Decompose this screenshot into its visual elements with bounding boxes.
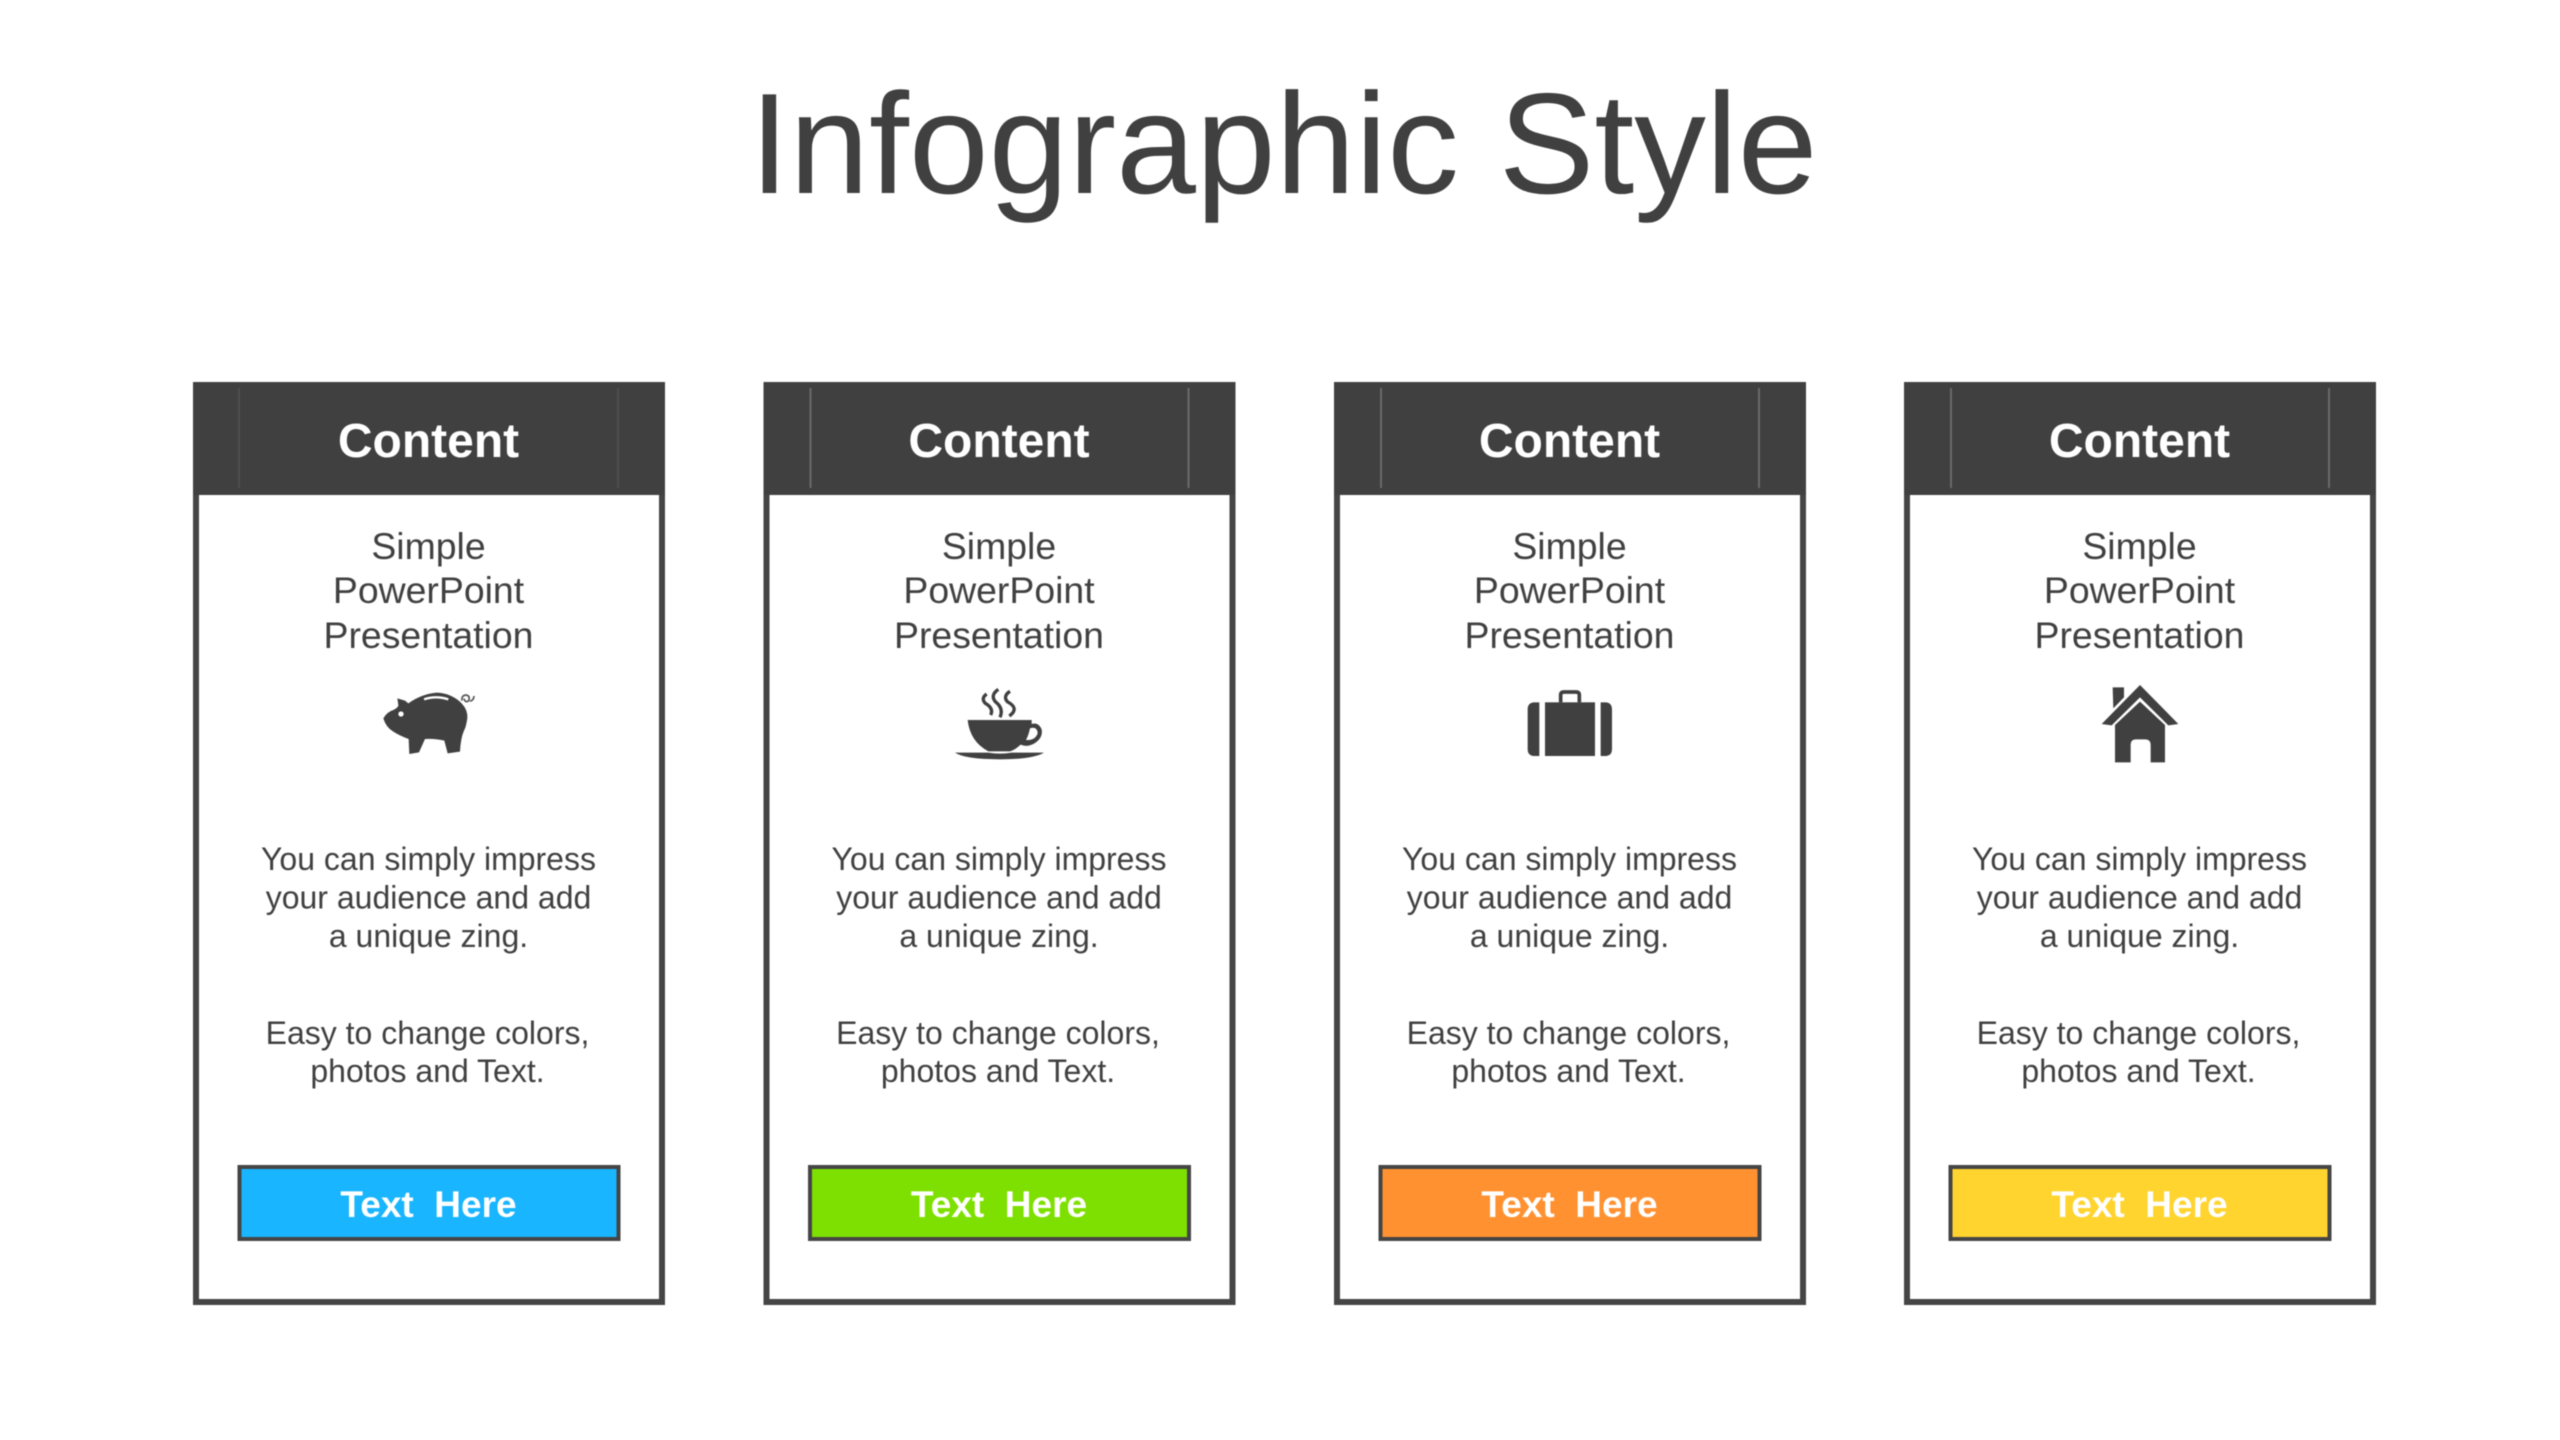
icon: piggy bank	[383, 693, 474, 754]
card 3 header	[1334, 382, 1806, 495]
card 3 subtitle: Presentation	[1465, 614, 1674, 656]
card 2 description: a unique zing.	[899, 918, 1099, 954]
card 3 subtitle: Simple	[1512, 525, 1627, 567]
icon: house	[2102, 685, 2178, 762]
card 2 note: Easy to change colors,	[836, 1015, 1160, 1051]
card 3 button	[1380, 1167, 1760, 1239]
card 1 description: You can simply impress	[261, 841, 596, 877]
card 2 button: Text Here	[911, 1184, 1087, 1225]
card 3 description: You can simply impress	[1402, 841, 1737, 877]
card 4 description: a unique zing.	[2040, 918, 2239, 954]
card 1 description: your audience and add	[266, 880, 591, 916]
icon: briefcase	[1528, 692, 1612, 756]
card 4 description: your audience and add	[1977, 880, 2302, 916]
card 4 button	[1950, 1167, 2330, 1239]
card 2 subtitle: PowerPoint	[903, 569, 1095, 611]
card 1 header	[193, 382, 665, 495]
card 1 header: Content	[338, 415, 519, 468]
card 3 header: Content	[1479, 415, 1660, 468]
card 1 button	[240, 1167, 618, 1239]
panel: card 1	[193, 382, 665, 1302]
card 2 note: photos and Text.	[881, 1053, 1115, 1089]
card 1 note: Easy to change colors,	[266, 1015, 589, 1051]
card 2 header: Content	[908, 415, 1090, 468]
card 2 button	[810, 1167, 1189, 1239]
panel: card 2	[764, 382, 1236, 1302]
card 1 button: Text Here	[340, 1184, 517, 1225]
card 4 header	[1904, 382, 2376, 495]
card 3 description: your audience and add	[1407, 880, 1732, 916]
card 1 subtitle: Simple	[371, 525, 486, 567]
panel: card 3	[1334, 382, 1806, 1302]
card 2 header	[764, 382, 1236, 495]
card 1 subtitle: Presentation	[324, 614, 533, 656]
card 3 note: Easy to change colors,	[1407, 1015, 1730, 1051]
card 1 description: a unique zing.	[329, 918, 528, 954]
card 2 description: You can simply impress	[832, 841, 1166, 877]
card 4 subtitle: Simple	[2082, 525, 2197, 567]
card 2 description: your audience and add	[836, 880, 1162, 916]
icon: coffee cup	[955, 689, 1044, 759]
card 2 subtitle: Presentation	[894, 614, 1104, 656]
card 4 header: Content	[2049, 415, 2230, 468]
card 4 subtitle: PowerPoint	[2044, 569, 2236, 611]
card 4 note: photos and Text.	[2021, 1053, 2256, 1089]
card 1 note: photos and Text.	[310, 1053, 545, 1089]
card 3 subtitle: PowerPoint	[1474, 569, 1666, 611]
card 4 subtitle: Presentation	[2035, 614, 2244, 656]
card 3 note: photos and Text.	[1451, 1053, 1686, 1089]
card 3 button: Text Here	[1481, 1184, 1658, 1225]
card 2 subtitle: Simple	[942, 525, 1056, 567]
card 1 subtitle: PowerPoint	[333, 569, 525, 611]
card 4 button: Text Here	[2051, 1184, 2228, 1225]
card 4 note: Easy to change colors,	[1977, 1015, 2300, 1051]
title: Infographic Style	[750, 64, 1817, 224]
card 3 description: a unique zing.	[1470, 918, 1669, 954]
card 4 description: You can simply impress	[1972, 841, 2307, 877]
panel: card 4	[1904, 382, 2376, 1302]
